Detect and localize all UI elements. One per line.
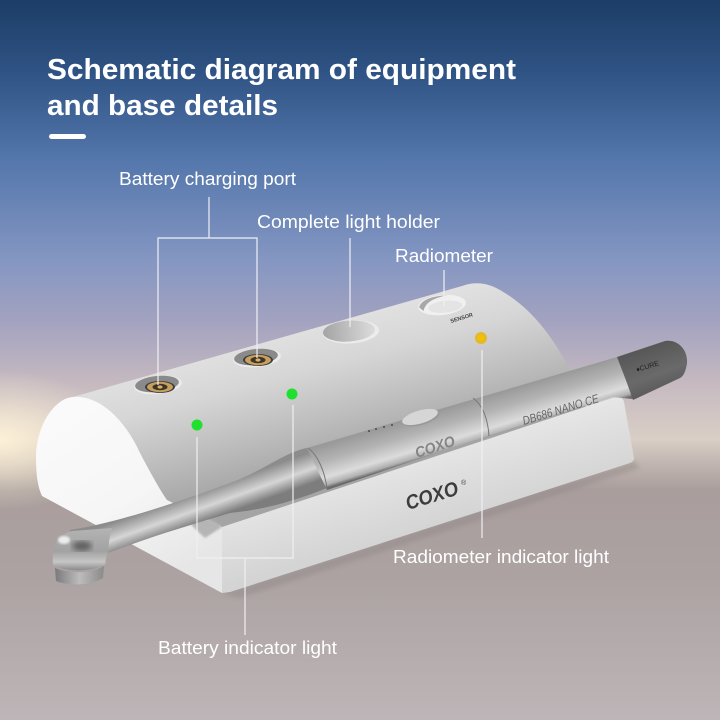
curing light pen: [53, 341, 687, 584]
pen barrel: [307, 357, 633, 490]
sensor label: SENSOR: [450, 312, 474, 325]
tray front: [222, 397, 634, 593]
indicator green left: [192, 420, 202, 430]
coxo logo: COXO: [403, 478, 461, 515]
tray ground shadow: [222, 461, 640, 598]
charging port right: [232, 347, 282, 369]
base unit: [36, 283, 640, 598]
title: [47, 54, 516, 122]
pen neck: [70, 448, 327, 555]
pen end cap: [617, 341, 687, 400]
pen brand: COXO: [413, 433, 458, 462]
light holder hole: [322, 319, 380, 345]
label: battery charging port: Battery charging port: [119, 169, 296, 189]
base body: [73, 283, 600, 560]
label: radiometer: Radiometer: [395, 246, 493, 266]
tray inner shadow: [186, 517, 222, 538]
indicator green right: [286, 388, 298, 400]
battery dots: [368, 424, 393, 432]
radiometer sensor: [417, 293, 467, 317]
power button: [400, 406, 441, 430]
barrel joints: [308, 398, 489, 489]
label: radiometer indicator light: Radiometer indicator light: [393, 547, 609, 567]
label: battery indicator light: Battery indicator light: [158, 638, 337, 658]
label: complete light holder: Complete light holder: [257, 212, 440, 232]
indicator yellow: [475, 332, 487, 344]
charging port left: [133, 374, 183, 396]
pen model: DB686 NANO CE: [521, 391, 601, 428]
pen head: [53, 528, 112, 584]
title: Schematic diagram of equipment: [47, 54, 516, 86]
title: and base details: [47, 90, 278, 122]
registered mark: ®: [461, 479, 467, 487]
end cap: [36, 397, 222, 593]
cure label: ♦CURE: [636, 360, 660, 374]
leader lines: [158, 197, 482, 635]
title underline: [49, 134, 86, 139]
